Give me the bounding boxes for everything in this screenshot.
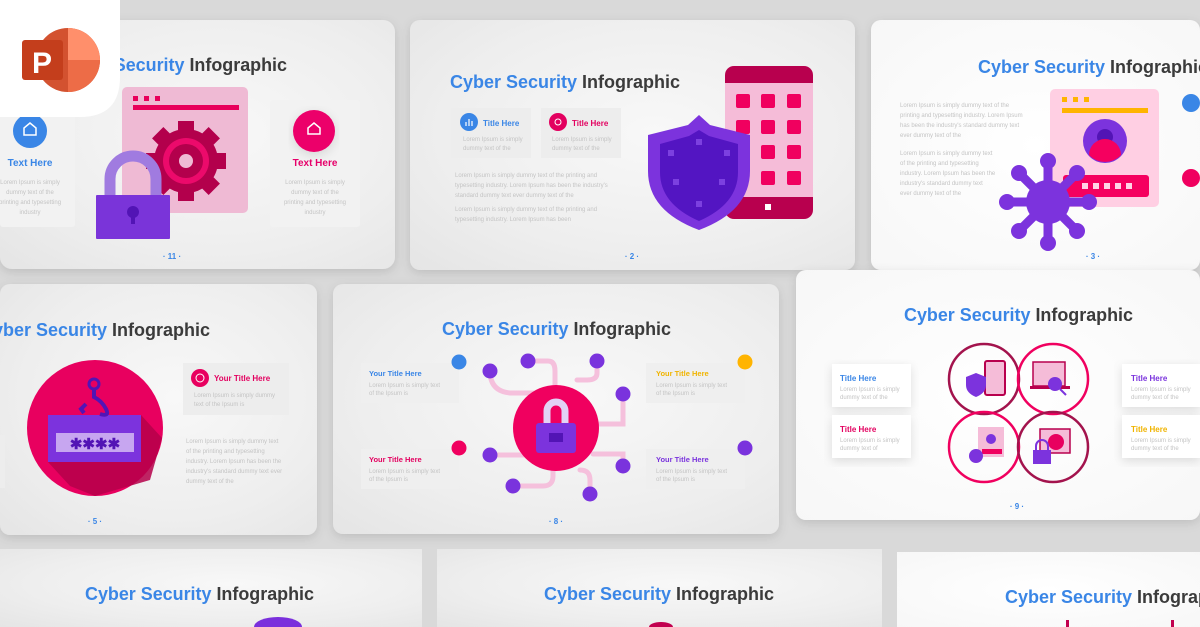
card: your title — [183, 364, 275, 415]
card: your title: text of the Ipsum is — [194, 402, 244, 408]
paragraph: Lorem Ipsum is simply dummy text of the printing and — [455, 207, 597, 213]
cards: dummy text of the — [1131, 395, 1179, 401]
cards: Lorem Ipsum is simply — [1131, 387, 1191, 393]
card right: dummy text of the — [291, 190, 340, 196]
paragraph: ever dummy text of the — [900, 191, 962, 197]
icon: phishing circle — [27, 360, 163, 496]
paragraph: Lorem Ipsum is simply dummy text — [900, 151, 993, 157]
icon: browser gear — [122, 87, 248, 213]
cards: Title Here — [1131, 374, 1168, 383]
card right: printing and typesetting — [284, 200, 346, 206]
paragraph: industry. Lorem Ipsum has been the — [900, 171, 996, 177]
paragraph — [455, 173, 608, 223]
icon: central lock — [513, 385, 599, 471]
page number 8: · 8 · — [549, 517, 563, 526]
slide 5 — [0, 284, 317, 535]
card: pink title: dummy text of the — [552, 146, 600, 152]
card left: printing and typesetting — [0, 200, 61, 206]
card: blue title: Lorem Ipsum is simply — [463, 137, 523, 143]
card: blue: of the Ipsum is — [369, 391, 408, 397]
card: pink: Lorem Ipsum is simply text — [369, 469, 440, 475]
card: blue title: Title Here — [483, 119, 520, 128]
card: your title: Your Title Here — [214, 374, 271, 383]
logo: powerpoint: P — [32, 47, 52, 80]
cards — [832, 364, 1200, 458]
cards: Title Here — [1131, 425, 1168, 434]
card: blue — [369, 354, 466, 396]
cards: dummy text of the — [840, 395, 888, 401]
cards: dummy text of the — [1131, 446, 1179, 452]
card: pink — [369, 440, 466, 482]
slide 8 — [333, 284, 779, 534]
card: yellow: of the Ipsum is — [656, 391, 695, 397]
card: purple: Lorem Ipsum is simply text — [656, 469, 727, 475]
mini icons — [966, 361, 1070, 464]
paragraph: printing and typesetting industry. Lorem Ipsum — [900, 113, 1023, 119]
card: yellow — [656, 354, 752, 396]
paragraph: has been the industry's standard dummy text — [900, 123, 1020, 129]
icon: phone — [725, 66, 813, 219]
icon: padlock — [96, 156, 170, 239]
card: yellow: Lorem Ipsum is simply text — [656, 383, 727, 389]
paragraph: Lorem Ipsum is simply dummy text — [186, 439, 279, 445]
card: pink title: Lorem Ipsum is simply — [552, 137, 612, 143]
icon: shield — [648, 115, 750, 230]
paragraph: Lorem Ipsum is simply dummy text of the printing and — [455, 173, 597, 179]
paragraph: industry's standard dummy text — [900, 181, 983, 187]
paragraph — [186, 439, 282, 485]
card right: Lorem Ipsum is simply — [285, 180, 345, 186]
card left — [0, 117, 61, 227]
icon: login card — [1050, 89, 1159, 207]
card: pink: of the Ipsum is — [369, 477, 408, 483]
slide bottom right — [897, 552, 1200, 627]
paragraph: dummy text of the — [186, 479, 234, 485]
cards: Lorem Ipsum is simply — [840, 438, 900, 444]
page number 3: · 3 · — [1086, 252, 1100, 261]
title slide 8: Cyber Security Infographic — [442, 319, 671, 339]
slide 9 — [796, 270, 1200, 520]
slide bottom middle — [437, 549, 882, 627]
slide bottom middle: Cyber Security Infographic — [544, 584, 774, 604]
card left: Lorem Ipsum is simply — [0, 180, 60, 186]
network lines — [490, 361, 623, 494]
card: yellow: Your Title Here — [656, 369, 709, 378]
title slide 9: Cyber Security Infographic — [904, 305, 1133, 325]
card: blue: Lorem Ipsum is simply text — [369, 383, 440, 389]
paragraph: standard dummy text ever dummy text of the — [455, 193, 574, 199]
page number 11: · 11 · — [163, 252, 181, 261]
paragraph: Lorem Ipsum is simply dummy text of the — [900, 103, 1010, 109]
paragraph: industry's standard dummy text ever — [186, 469, 282, 475]
title slide 11: Cyber Security Infographic — [58, 55, 287, 75]
card: blue title — [460, 113, 523, 152]
logo: powerpoint — [0, 0, 120, 117]
paragraph — [900, 103, 1023, 197]
paragraph: ever dummy text of the — [900, 133, 962, 139]
card: purple — [656, 440, 752, 482]
card right: Text Here — [293, 158, 338, 169]
card: pink title: Title Here — [572, 119, 609, 128]
card left: Text Here — [8, 158, 53, 169]
card: blue title: dummy text of the — [463, 146, 511, 152]
card: purple: Your Title Here — [656, 455, 709, 464]
title slide 2: Cyber Security Infographic — [450, 72, 680, 92]
cards: Lorem Ipsum is simply — [840, 387, 900, 393]
network nodes — [482, 354, 630, 502]
cards: Title Here — [840, 374, 877, 383]
card left: industry — [19, 210, 41, 216]
paragraph: industry. Lorem Ipsum has been the — [186, 459, 282, 465]
page number 5: · 5 · — [88, 517, 102, 526]
paragraph: typesetting industry. Lorem Ipsum has been — [455, 217, 571, 223]
icon circles right — [1182, 94, 1200, 187]
page number 2: · 2 · — [625, 252, 639, 261]
card left: dummy text of the — [6, 190, 55, 196]
cards: Lorem Ipsum is simply — [1131, 438, 1191, 444]
card: your title: Lorem Ipsum is simply dummy — [194, 393, 275, 399]
slide 11 — [0, 20, 395, 269]
four circles — [949, 344, 1088, 482]
icon: phishing circle: ✱✱✱✱ — [70, 436, 121, 453]
card: blue: Your Title Here — [369, 369, 422, 378]
slide bottom left: Cyber Security Infographic — [85, 584, 314, 604]
icon: virus — [999, 153, 1097, 251]
paragraph: of the printing and typesetting — [900, 161, 979, 167]
slide bottom left — [0, 549, 422, 627]
page number 9: · 9 · — [1010, 502, 1024, 511]
cards: dummy text of — [840, 446, 878, 452]
paragraph: of the printing and typesetting — [186, 449, 265, 455]
card right — [284, 110, 346, 216]
slide 3 — [871, 20, 1200, 270]
card right: industry — [304, 210, 326, 216]
cards: Title Here — [840, 425, 877, 434]
slide 2 — [410, 20, 855, 270]
card: pink title — [549, 108, 621, 158]
card: pink: Your Title Here — [369, 455, 422, 464]
paragraph: typesetting industry. Lorem Ipsum has been the industry's — [455, 183, 608, 189]
card: purple: of the Ipsum is — [656, 477, 695, 483]
